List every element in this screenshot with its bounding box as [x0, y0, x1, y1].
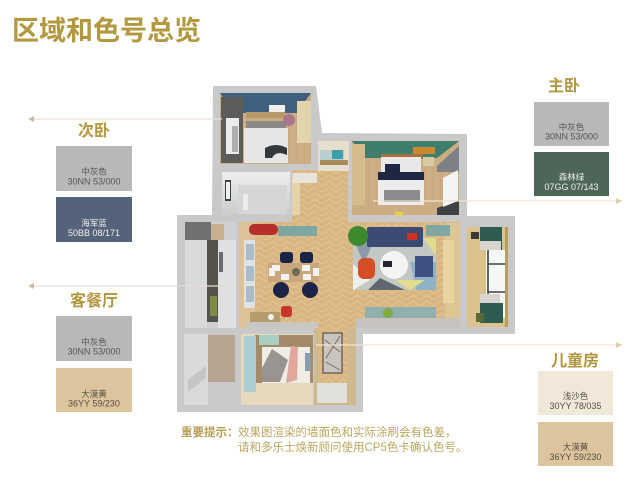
- room: living room: [347, 222, 460, 328]
- swatch: navy blue: 50BB 08/171: [68, 228, 120, 238]
- swatch: mid grey: [56, 316, 132, 361]
- swatch: navy blue: 海军蓝: [81, 218, 107, 228]
- heading: 客餐厅: [70, 291, 118, 310]
- swatch: forest green: 07GG 07/143: [544, 182, 599, 192]
- panel: living and dining room: [56, 291, 132, 412]
- room: kids bedroom: [241, 334, 313, 405]
- swatch: light sand: 30YY 78/035: [550, 401, 601, 411]
- swatch: desert yellow: 36YY 59/230: [68, 398, 120, 408]
- swatch: mid grey: [56, 146, 132, 191]
- arrow: second bedroom: [28, 116, 222, 122]
- room: balcony: [467, 227, 508, 327]
- swatch: mid grey: 中灰色: [81, 337, 107, 347]
- notice: 重要提示：: [181, 425, 238, 439]
- arrow: master bedroom: [373, 198, 622, 204]
- arrow: kids bedroom: [316, 342, 622, 348]
- swatch: mid grey: 30NN 53/000: [545, 132, 598, 142]
- swatch: desert yellow: 大漠黄: [81, 389, 107, 399]
- swatch: light sand: 浅沙色: [563, 391, 589, 401]
- swatch: forest green: 森林绿: [559, 172, 585, 182]
- room: kitchen: [185, 222, 236, 328]
- heading: 主卧: [548, 76, 580, 95]
- arrow: living and dining room: [28, 283, 236, 289]
- room: dining area: [239, 222, 347, 328]
- room: bathroom: [222, 172, 290, 215]
- heading: 儿童房: [551, 351, 599, 370]
- notice: 请和多乐士焕新顾问使用CP5色卡确认色号。: [238, 440, 467, 454]
- swatch: mid grey: 30NN 53/000: [67, 176, 121, 186]
- notice: 效果图渲染的墙面色和实际涂刷会有色差，: [238, 425, 456, 439]
- swatch: mid grey: 30NN 53/000: [67, 346, 121, 356]
- swatch: desert yellow: [56, 368, 132, 412]
- swatch: mid grey: 中灰色: [81, 166, 107, 176]
- room: hallway with rug: [314, 328, 356, 405]
- floor plan: [177, 86, 515, 412]
- swatch: mid grey: [534, 102, 609, 146]
- panel: master bedroom: [534, 76, 609, 196]
- room: master bedroom: [352, 141, 459, 216]
- swatch: light sand: [538, 371, 613, 415]
- notice: [181, 425, 467, 454]
- room: storage: [184, 334, 235, 405]
- panel: kids bedroom: [538, 351, 613, 466]
- swatch: mid grey: 中灰色: [559, 122, 585, 132]
- heading: 次卧: [78, 122, 110, 140]
- room: second bedroom: [220, 93, 311, 164]
- swatch: forest green: [534, 152, 609, 196]
- outer walls: [177, 86, 515, 412]
- room: hall and herringbone floor: [292, 141, 349, 230]
- title: 区域和色号总览: [12, 16, 201, 46]
- swatch: desert yellow: 36YY 59/230: [550, 452, 601, 462]
- swatch: desert yellow: [538, 422, 613, 466]
- panel: second bedroom: [56, 122, 132, 242]
- swatch: desert yellow: 大漠黄: [563, 442, 589, 452]
- swatch: navy blue: [56, 197, 132, 242]
